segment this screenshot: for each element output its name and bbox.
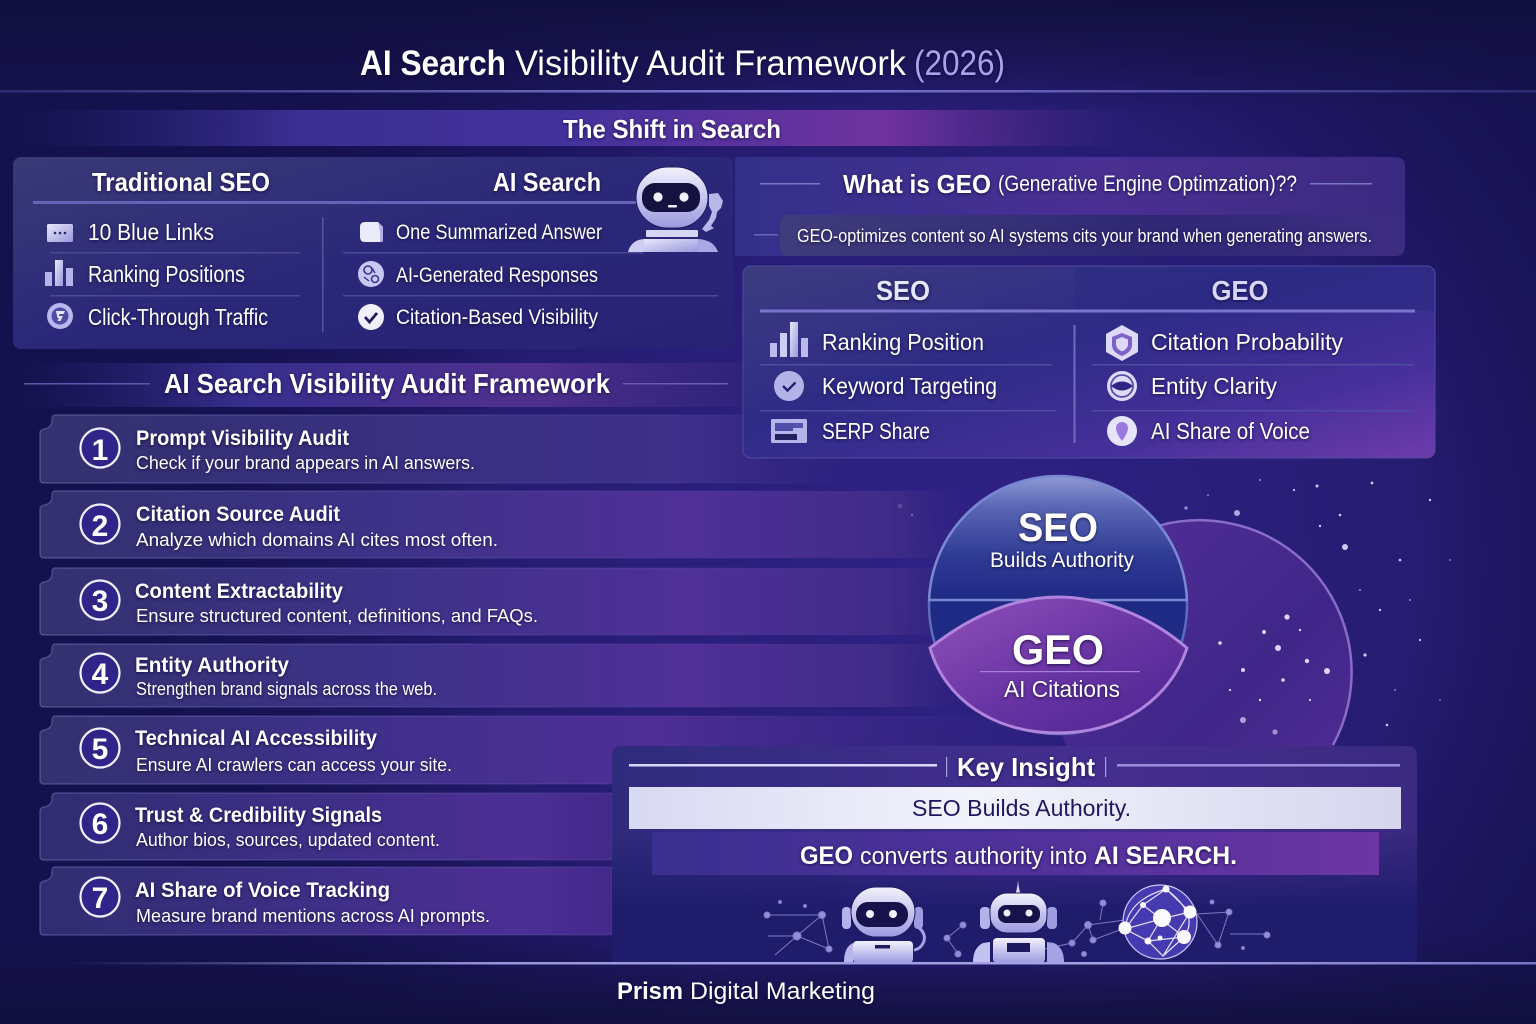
step 2: citation source audit: Citation Source Audit [136,503,340,526]
step 6: trust and credibility signals [40,793,612,860]
step 3: content extractability: Ensure structured content, definitions, and FAQs. [136,606,538,626]
step 4: entity authority: Strengthen brand signals across the web. [136,679,437,699]
step 7: AI share of voice tracking: AI Share of Voice Tracking [135,879,390,902]
step 4: entity authority: Entity Authority [135,654,289,677]
item: AI-generated responses [358,261,598,287]
icon: robot 1 [842,887,924,963]
footer: prism digital marketing [617,978,875,1005]
item: ranking position [770,322,984,357]
heading: key insight: Key Insight [957,752,1095,782]
audit framework steps [40,415,1060,935]
title: AI Search [360,44,506,83]
lens: GEO AI citations: GEO [1012,626,1104,673]
step 5: technical AI accessibility: 5 [92,733,108,766]
circle: SEO builds authority: SEO [1018,506,1098,550]
step 4: entity authority: 4 [92,658,109,691]
footer: prism digital marketing: Digital Marketing [690,978,875,1005]
section banner: the shift in search [20,110,1130,146]
step 2: citation source audit: Analyze which domains AI cites most often. [136,530,498,550]
item: AI share of voice [1107,416,1310,446]
step 1: prompt visibility audit [40,415,860,483]
step 1: prompt visibility audit: 1 [92,434,108,467]
step 1: prompt visibility audit: Check if your brand appears in AI answers. [136,453,475,473]
lens: GEO AI citations: AI Citations [1004,676,1120,702]
step 6: trust and credibility signals: 6 [92,808,108,841]
step 3: content extractability: Content Extractability [135,580,343,603]
step 2: citation source audit [40,491,960,558]
item: citation probability [1106,325,1343,361]
step 4: entity authority [40,644,960,707]
network illustration [764,900,1270,957]
callout: GEO converts authority: AI SEARCH. [1094,842,1237,870]
section heading: AI search visibility audit framework: AI Search Visibility Audit Framework [164,368,610,399]
step 5: technical AI accessibility: Technical AI Accessibility [135,727,377,750]
step 6: trust and credibility signals: Trust & Credibility Signals [135,804,382,827]
venn diagram: SEO and GEO [929,476,1187,734]
item: click-through traffic [47,303,268,330]
title: (2026) [914,44,1005,83]
title [360,44,1005,83]
step 7: AI share of voice tracking: 7 [92,882,108,915]
callout: SEO builds authority [629,787,1401,829]
item: citation probability: Citation Probability [1151,329,1343,355]
step 6: trust and credibility signals: Author bios, sources, updated content. [136,830,440,850]
step 2: citation source audit: 2 [92,510,108,543]
panel: traditional SEO vs AI search [13,157,733,349]
item: keyword targeting: Keyword Targeting [822,373,997,399]
step 7: AI share of voice tracking: Measure brand mentions across AI prompts. [136,906,490,926]
item: 10 blue links: 10 Blue Links [88,219,214,245]
panel: what is GEO [735,157,1405,256]
item: entity clarity: Entity Clarity [1151,373,1277,399]
step 3: content extractability [40,568,960,635]
heading: GEO: GEO [1212,275,1268,306]
icon: robot mascot [628,167,723,252]
circle: SEO builds authority: Builds Authority [990,549,1134,572]
item: ranking positions [45,260,245,287]
star field [898,479,1451,726]
item: citation-based visibility: Citation-Based Visibility [396,306,598,329]
section banner: the shift in search: The Shift in Search [563,114,781,144]
icon: network globe [1118,885,1197,959]
heading: traditional SEO: Traditional SEO [92,167,270,197]
step 3: content extractability: 3 [92,585,108,618]
step 1: prompt visibility audit: Prompt Visibility Audit [136,427,349,450]
callout: GEO converts authority [652,832,1379,875]
title: Visibility Audit Framework [515,44,906,83]
callout: SEO builds authority: SEO Builds Authority. [912,795,1131,821]
item: ranking position: Ranking Position [822,329,984,355]
step 5: technical AI accessibility [40,716,1060,784]
item: ranking positions: Ranking Positions [88,261,245,287]
section heading: AI search visibility audit framework [20,363,760,407]
lens: GEO AI citations [930,597,1187,733]
venn background circle [1048,520,1352,824]
footer: prism digital marketing: Prism [617,978,683,1005]
item: click-through traffic: Click-Through Traffic [88,304,268,330]
heading: AI search: AI Search [493,167,601,197]
item: SERP share [771,418,930,444]
callout: GEO converts authority: converts authority into [860,843,1087,870]
circle: SEO builds authority [929,476,1187,734]
heading: SEO: SEO [876,275,930,306]
panel: key insight [612,746,1417,964]
panel: SEO vs GEO table [743,266,1435,458]
item: SERP share: SERP Share [822,418,930,444]
heading: what is GEO: What is GEO [843,169,991,199]
item: AI-generated responses: AI-Generated Responses [396,264,598,287]
callout: GEO converts authority: GEO [800,842,853,870]
heading: what is GEO [843,169,1297,199]
step 7: AI share of voice tracking [40,867,612,935]
item: AI share of voice: AI Share of Voice [1151,418,1310,444]
definition text [780,215,1405,256]
icon: robot 2 [973,880,1064,963]
heading: what is GEO: (Generative Engine Optimzation)?? [998,171,1297,196]
step 5: technical AI accessibility: Ensure AI crawlers can access your site. [136,755,452,775]
footer rule [60,962,1536,964]
item: one summarized answer: One Summarized Answer [396,221,602,244]
item: keyword targeting [774,371,997,401]
definition text: GEO-optimizes content so AI systems cits your brand when generating answers. [797,226,1372,246]
item: entity clarity [1107,371,1277,401]
